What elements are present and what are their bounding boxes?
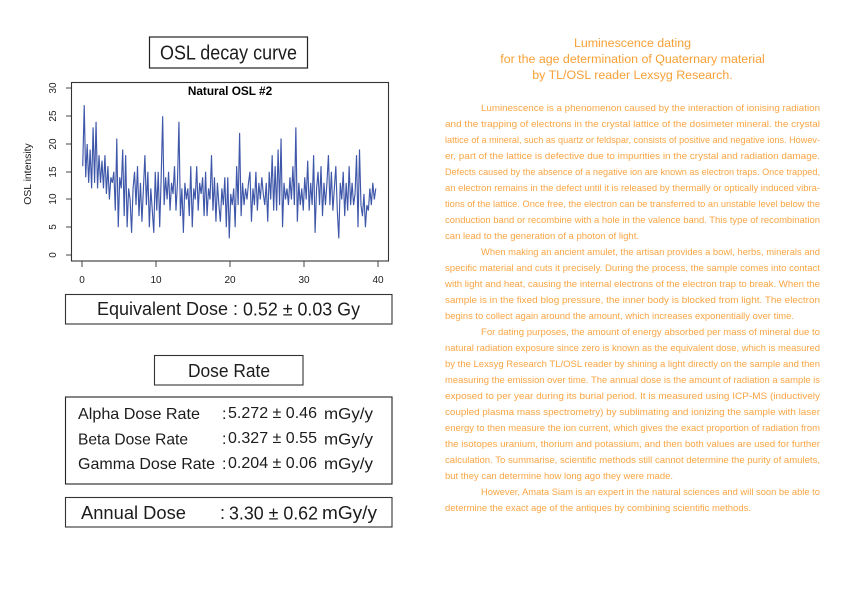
- beta dose rate: 0.327 ± 0.55: [228, 430, 317, 447]
- panel: equivalent dose: 0.52 ± 0.03 Gy: [243, 300, 360, 320]
- title: Luminescence dating: by TL/OSL reader Lexsyg Research.: [532, 68, 733, 82]
- beta dose rate: :: [222, 431, 226, 448]
- gamma dose rate: :: [222, 456, 226, 473]
- panel: equivalent dose: Equivalent Dose :: [97, 299, 238, 319]
- text block: body paragraphs: tions of the lattice. Once free, the electron can be transferred to an unstable level below the: [445, 199, 820, 209]
- text block: body paragraphs: the isotopes uranium, thorium and potassium, and then both values are used for further: [445, 439, 820, 449]
- panel: annual dose: Annual Dose: [81, 503, 186, 523]
- text block: body paragraphs: Luminescence is a phenomenon caused by the interaction of ionising radiation: [481, 103, 820, 113]
- text block: body paragraphs: an electron remains in the defect until it is released by thermally or optically induced vibra-: [445, 183, 820, 193]
- alpha dose rate: mGy/y: [324, 406, 373, 423]
- gamma dose rate: mGy/y: [324, 456, 373, 473]
- line chart: Natural OSL #2: [23, 82, 388, 286]
- text block: body paragraphs: [444, 103, 820, 513]
- beta dose rate: mGy/y: [324, 432, 373, 448]
- text block: body paragraphs: For dating purposes, the amount of energy absorbed per mass of mineral due to: [481, 327, 820, 337]
- title: Luminescence dating: Luminescence dating: [574, 36, 691, 50]
- data line: [83, 105, 376, 238]
- y axis label: OSL intensity: [23, 142, 34, 205]
- beta dose rate: Beta Dose Rate: [78, 432, 188, 448]
- heading: Dose Rate: Dose Rate: [188, 361, 270, 381]
- panel: annual dose: mGy/y: [322, 503, 377, 523]
- panel: annual dose: :: [220, 503, 225, 523]
- y axis: [66, 88, 71, 255]
- text block: body paragraphs: specific material and cuts it precisely. During the process, the sample comes into contact: [445, 263, 820, 273]
- beta dose rate: [78, 430, 373, 448]
- text block: body paragraphs: coupled plasma mass spectrometry) by sublimating and ionizing the sample with laser: [445, 407, 820, 417]
- line chart: Natural OSL #2: 20: [224, 275, 236, 286]
- gamma dose rate: 0.204 ± 0.06: [228, 455, 317, 472]
- line chart: Natural OSL #2: 20: [48, 138, 59, 150]
- text block: body paragraphs: natural radiation exposure since zero is known as the equivalent dose, which is measured: [445, 343, 820, 353]
- heading: OSL decay curve: OSL decay curve: [160, 42, 297, 64]
- line chart: Natural OSL #2: 10: [48, 193, 59, 205]
- text block: body paragraphs: er, part of the lattice is defective due to impurities in the crystal and radiation damage.: [445, 151, 820, 161]
- text block: body paragraphs: conduction band or recombine with a hole in the valence band. This type of recombination: [445, 215, 820, 225]
- panel: dose rate values: [66, 397, 392, 484]
- left column: chart and dose panels: [23, 36, 393, 528]
- panel: equivalent dose: [66, 294, 392, 324]
- text block: body paragraphs: measuring the emission over time. The annual dose is the amount of radiation a sample is: [445, 375, 820, 385]
- text block: body paragraphs: and the trapping of electrons in the crystal lattice of the dosimeter mineral. the crystal: [445, 119, 820, 129]
- text block: body paragraphs: calculation. To summarise, scientific methods still cannot determine the purity of amulets,: [445, 455, 820, 465]
- x axis: [82, 261, 378, 267]
- heading: OSL decay curve: [150, 37, 308, 68]
- panel: annual dose: 3.30 ± 0.62: [229, 504, 318, 524]
- line chart: Natural OSL #2: 30: [298, 275, 310, 286]
- line chart: Natural OSL #2: 15: [48, 166, 59, 178]
- text block: body paragraphs: can lead to the generation of a photon of light.: [445, 231, 639, 241]
- line chart: Natural OSL #2: 5: [48, 224, 59, 230]
- text block: body paragraphs: by the Lexsyg Research TL/OSL reader by shining a light directly on the sample and then: [445, 359, 820, 369]
- text block: body paragraphs: determine the exact age of the antiques by combining scientific methods.: [445, 503, 751, 513]
- alpha dose rate: :: [222, 406, 226, 423]
- alpha dose rate: Alpha Dose Rate: [78, 406, 200, 423]
- gamma dose rate: Gamma Dose Rate: [78, 456, 215, 473]
- text block: body paragraphs: sample is in the fixed blog pressure, the inner body is blocked from light. The electron: [445, 295, 820, 305]
- title: Luminescence dating: for the age determination of Quaternary material: [500, 52, 765, 66]
- title: Luminescence dating: [500, 36, 765, 82]
- heading: Dose Rate: [154, 356, 303, 385]
- text block: body paragraphs: energy to then measure the ion current, which gives the exact proportion of radiation from: [445, 423, 820, 433]
- text block: body paragraphs: begins to collect again around the amount, which increases exponentially over time.: [445, 311, 794, 321]
- line chart: Natural OSL #2: 0: [79, 275, 85, 286]
- text block: body paragraphs: Defects caused by the absence of a negative ion are known as electron traps. Once trapped,: [445, 167, 820, 177]
- line chart: Natural OSL #2: 0: [48, 252, 59, 258]
- line chart: Natural OSL #2: 25: [48, 110, 59, 122]
- text block: body paragraphs: but they can determine how long ago they were made.: [445, 471, 673, 481]
- text block: body paragraphs: However, Amata Siam is an expert in the natural sciences and will soon be able to: [481, 487, 820, 497]
- text block: body paragraphs: with light and heat, causing the internal electrons of the electron trap to break. When the: [444, 279, 820, 289]
- line chart: Natural OSL #2: 30: [48, 82, 59, 94]
- line chart: Natural OSL #2: 10: [150, 275, 162, 286]
- text block: body paragraphs: exposed to per year during its burial period. It is measured using ICP-MS (inductively: [445, 391, 820, 401]
- panel: annual dose: [66, 498, 392, 527]
- text block: body paragraphs: When making an ancient amulet, the artisan provides a bowl, herbs, minerals and: [481, 247, 820, 257]
- alpha dose rate: 5.272 ± 0.46: [228, 405, 317, 422]
- alpha dose rate: [78, 405, 373, 423]
- gamma dose rate: [78, 455, 373, 473]
- chart title: Natural OSL #2: [188, 84, 273, 98]
- line chart: Natural OSL #2: 40: [372, 275, 384, 286]
- text block: body paragraphs: lattice of a mineral, such as quartz or feldspar, consists of positive and negative ions. Howev-: [445, 135, 820, 145]
